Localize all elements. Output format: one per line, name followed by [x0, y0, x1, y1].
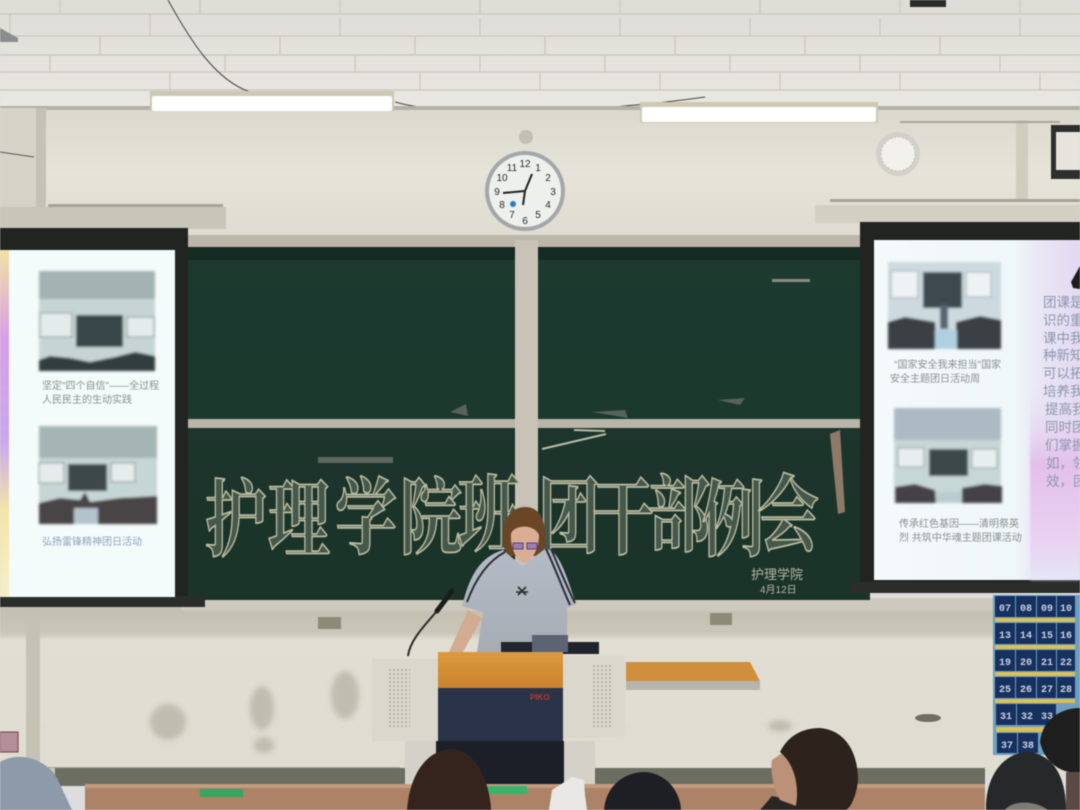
blackboard horizontal rail	[182, 419, 870, 428]
slide caption: right bottom: 传承红色基因——清明祭英	[899, 517, 1019, 530]
wall clock: 11	[507, 163, 518, 174]
hair back	[503, 507, 545, 556]
smoke detector	[876, 132, 920, 176]
side desk	[626, 662, 760, 690]
audience: head 1	[407, 749, 491, 810]
pocket organiser: 10	[1060, 604, 1072, 615]
face	[511, 527, 539, 563]
pocket organiser: 13	[999, 631, 1011, 642]
wall clock: 5	[535, 210, 541, 221]
blackboard frame	[182, 235, 1002, 611]
pocket organiser: 38	[1022, 741, 1034, 752]
presenter	[449, 507, 576, 652]
slide photo: right top	[888, 262, 1001, 349]
wall clock: 9	[494, 187, 500, 198]
pocket organiser: 15	[1041, 631, 1053, 642]
plastic bag on desk	[549, 777, 587, 810]
blackboard panel: upper right	[538, 247, 870, 419]
pocket organiser: 16	[1060, 631, 1072, 642]
chalk title	[205, 469, 819, 567]
pocket organiser	[993, 595, 1080, 755]
ceiling light: right	[640, 102, 878, 123]
slide photo: left top	[39, 271, 155, 371]
ceiling with tiles	[0, 0, 1080, 112]
chalk title: 理	[268, 474, 330, 567]
wall speaker	[1051, 125, 1080, 179]
shirt logo	[516, 587, 528, 595]
slide caption: left bottom: 弘扬雷锋精神团日活动	[42, 535, 142, 548]
blackboard panel: lower right	[538, 428, 870, 600]
chalk title: 学	[335, 472, 397, 565]
slide body text	[1043, 295, 1080, 489]
chalk title: 会	[757, 469, 819, 562]
wall clock: 6	[522, 216, 528, 227]
slide caption: right bottom: 烈 共筑中华魂主题团课活动	[899, 531, 1022, 544]
pocket organiser: 21	[1041, 658, 1053, 669]
pocket organiser: 33	[1041, 712, 1053, 723]
pocket organiser: 32	[1021, 712, 1033, 723]
slide caption: left top: 坚定"四个自信"——全过程	[42, 379, 159, 392]
slide: left	[0, 250, 175, 597]
dark object at slide edge	[1071, 266, 1080, 289]
ceiling light: left	[150, 91, 394, 111]
upper wall	[0, 106, 1080, 238]
blackboard panel: upper left	[182, 247, 515, 419]
microphone	[408, 591, 452, 656]
pocket organiser: 27	[1041, 685, 1053, 696]
pocket organiser: 07	[999, 604, 1011, 615]
chalk title: 干	[592, 472, 654, 565]
lectern: PIKO	[530, 693, 550, 702]
chalk title: 院	[400, 472, 462, 565]
pocket organiser: 25	[999, 685, 1011, 696]
chalk title: 班	[458, 469, 520, 562]
chalk title: 护	[205, 474, 267, 567]
audience: man in glasses	[760, 728, 858, 810]
wall clock: 1	[535, 163, 541, 174]
slide: right	[874, 240, 1080, 580]
pocket organiser: 09	[1041, 604, 1053, 615]
slide photo: left bottom	[39, 426, 157, 524]
projection screen: right	[850, 222, 1080, 593]
wall clock: 8	[499, 200, 505, 211]
chalk title: 部	[648, 469, 710, 562]
slide caption: right top: 安全主题团日活动周	[890, 372, 980, 385]
pocket organiser: 19	[999, 658, 1011, 669]
chalk title: 例	[702, 474, 764, 567]
pocket organiser: 22	[1060, 658, 1072, 669]
front desk	[85, 784, 985, 810]
wall clock	[485, 130, 565, 231]
pocket organiser: 20	[1020, 658, 1032, 669]
chalk title: 团	[538, 471, 600, 564]
slide caption: left top	[42, 379, 159, 406]
audience: head 2	[604, 772, 681, 810]
pocket organiser: 31	[1000, 712, 1012, 723]
pocket organiser: 26	[1020, 685, 1032, 696]
skirting and floor edge	[0, 768, 985, 786]
projection screen: left	[0, 228, 205, 607]
chalk signature	[751, 567, 803, 596]
audience: back heads	[986, 708, 1080, 810]
wall clock: 3	[550, 187, 556, 198]
pocket organiser: 37	[1001, 741, 1013, 752]
arms	[449, 600, 567, 652]
lectern	[372, 635, 625, 786]
chalk signature: 护理学院	[751, 567, 803, 582]
blackboard panel: lower left	[182, 428, 515, 600]
slide caption: right bottom	[899, 517, 1022, 544]
slide caption: left top: 人民民主的生动实践	[42, 393, 132, 406]
shirt	[462, 549, 576, 652]
pocket organiser: 08	[1020, 604, 1032, 615]
wall clock: 10	[496, 173, 508, 184]
slide caption: right top: "国家安全我来担当"国家	[894, 358, 1001, 371]
slide caption: right top	[890, 358, 1001, 385]
audience: left person	[0, 757, 72, 810]
pocket organiser: 28	[1060, 685, 1072, 696]
slide photo: right bottom	[894, 408, 1002, 503]
wall clock: 2	[545, 173, 551, 184]
lower wall	[0, 606, 1080, 776]
wall clock: 4	[545, 200, 551, 211]
wall clock: 7	[509, 210, 515, 221]
chalk signature: 4月12日	[760, 584, 797, 596]
glasses	[513, 543, 537, 549]
pocket organiser: 14	[1020, 631, 1032, 642]
wall clock: 12	[519, 159, 531, 170]
